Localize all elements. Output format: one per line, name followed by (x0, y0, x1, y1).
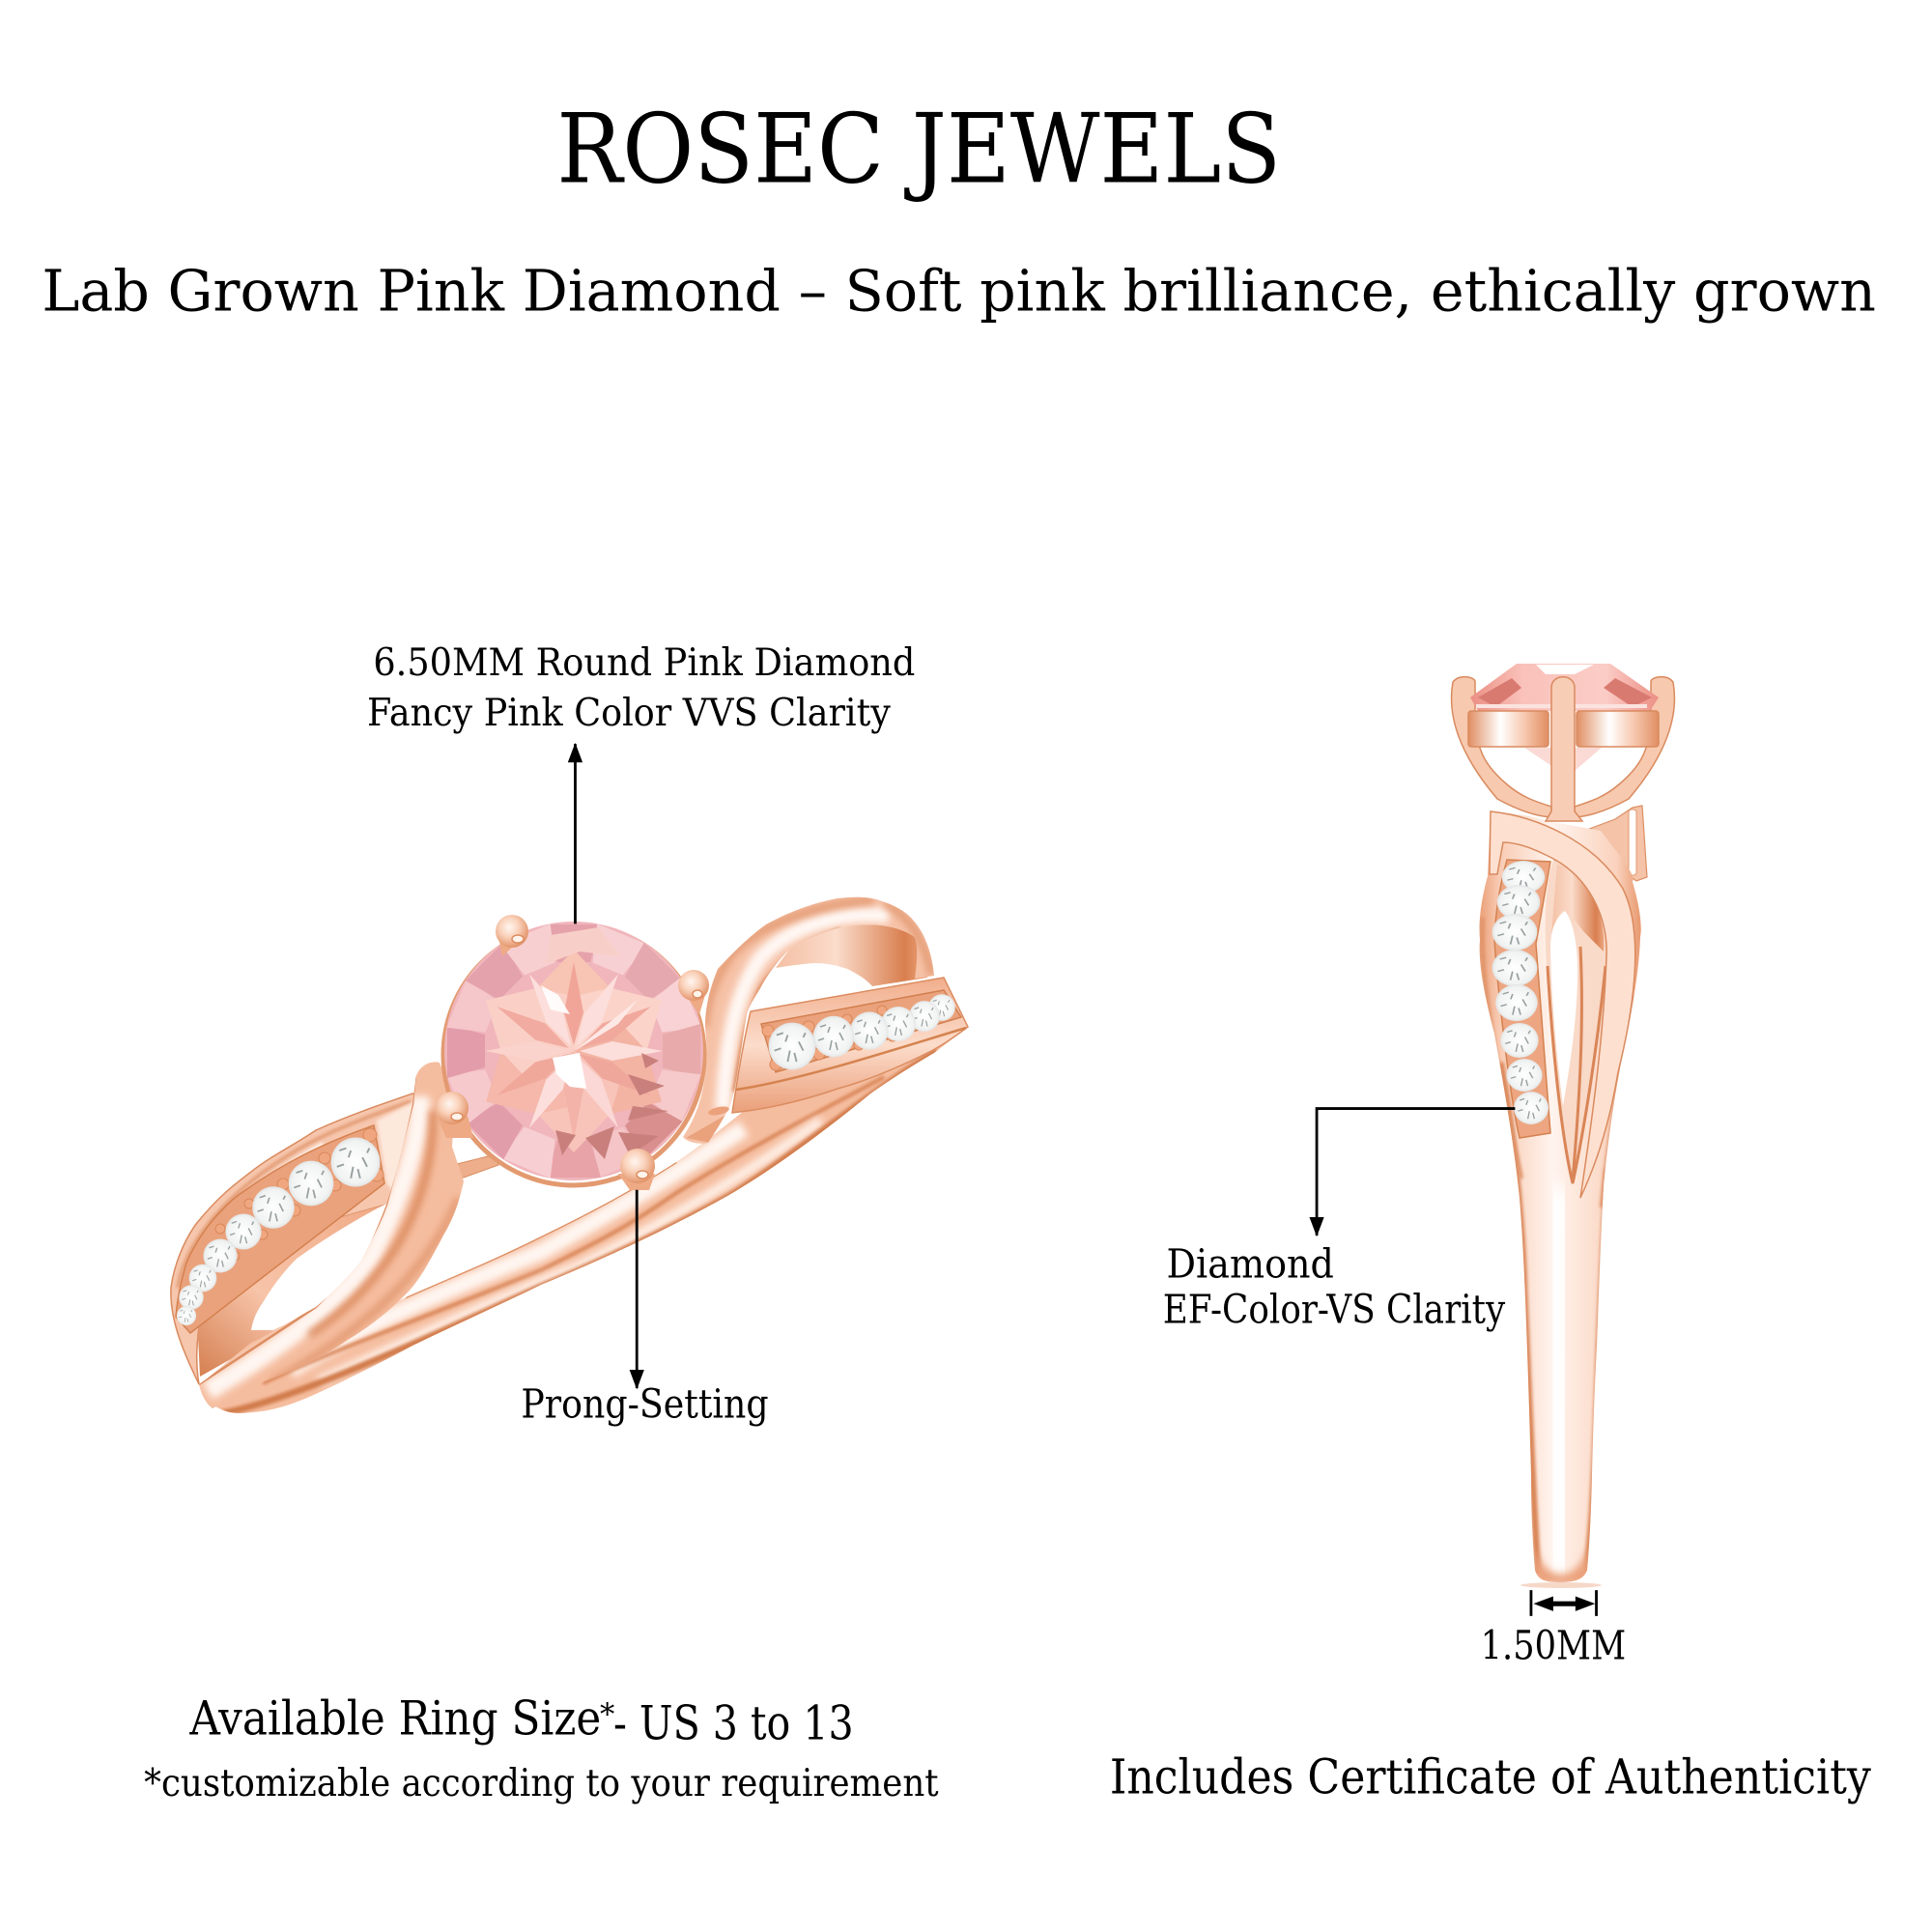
pink round stone (444, 922, 703, 1180)
channel beads (215, 1128, 384, 1261)
channel beads (762, 1006, 897, 1070)
left connector bar (449, 1154, 498, 1178)
leaf wall (198, 1205, 396, 1377)
title: ROSEC JEWELS (556, 95, 1281, 206)
side shank (1480, 811, 1641, 1584)
label: band width: 1.50MM (1481, 1623, 1626, 1669)
culet highlight (553, 1053, 586, 1089)
setting collar (443, 924, 704, 1185)
lower-right dark facets (555, 1053, 668, 1159)
ring size note (188, 1691, 854, 1750)
ring: side view (1452, 664, 1674, 1584)
shadow under side ring (1520, 1582, 1602, 1588)
subtitle: Lab Grown Pink Diamond – Soft pink brilliance, ethically grown (42, 258, 1876, 324)
ring: front three-quarter view (171, 897, 968, 1413)
side diamonds (1492, 861, 1548, 1124)
label: center stone (367, 640, 915, 735)
side diamond channel (1492, 860, 1550, 1138)
prong: right (678, 970, 709, 1014)
left diamond band (171, 1094, 425, 1384)
label: center stone: Fancy Pink Color VVS Clarity (367, 691, 892, 735)
arrow: prong label (636, 1190, 638, 1388)
prong: bottom (618, 1149, 655, 1190)
label: side diamonds: Diamond (1167, 1240, 1334, 1287)
lower shank band (199, 1027, 968, 1413)
label: side diamonds: EF-Color-VS Clarity (1163, 1286, 1505, 1332)
customizable note: *customizable according to your requirement (144, 1761, 939, 1805)
right diamond band (732, 978, 968, 1113)
label: center stone: 6.50MM Round Pink Diamond (373, 640, 915, 685)
gallery rail left (1468, 711, 1548, 747)
leaf opening (251, 1203, 388, 1330)
label: side diamonds (1163, 1240, 1505, 1332)
channel diamonds (769, 994, 955, 1069)
center prong (1546, 677, 1582, 821)
right twist strand (683, 897, 934, 1144)
prong: left (436, 1092, 473, 1138)
ring size note: * (600, 1698, 614, 1732)
arrow: diamond label (1317, 1109, 1515, 1236)
teardrop opening (1546, 860, 1607, 1183)
prong: top (496, 915, 528, 956)
dimension marker (1531, 1590, 1597, 1616)
side twist band (1490, 811, 1635, 1198)
side prong left (1452, 677, 1551, 817)
channel diamonds (177, 1138, 380, 1325)
left twist strand (199, 1062, 464, 1408)
arrow: stone label (574, 744, 577, 923)
ring size note: - US 3 to 13 (613, 1696, 854, 1750)
right crescent back (776, 924, 927, 986)
gallery rail right (1577, 711, 1659, 747)
ring size note: Available Ring Size (188, 1691, 601, 1746)
side prong right (1575, 677, 1674, 817)
pavilion (1524, 748, 1602, 777)
side stone crown (1470, 664, 1659, 711)
channel (176, 1125, 384, 1333)
label: prong setting: Prong-Setting (521, 1381, 769, 1428)
back strand (1584, 806, 1647, 881)
